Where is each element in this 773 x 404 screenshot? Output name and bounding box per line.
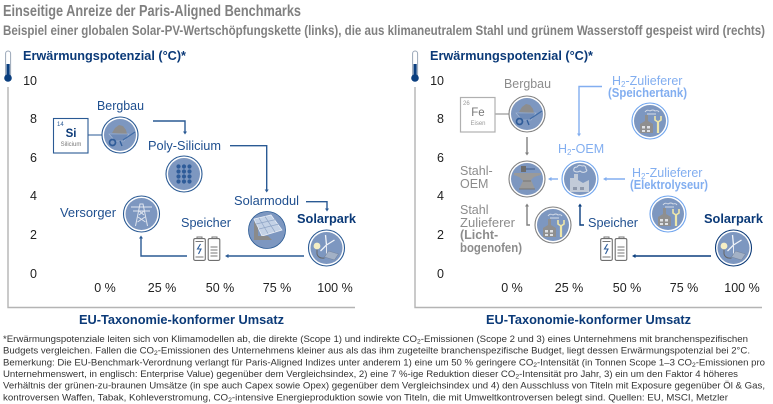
footnote: -Emissionen pro (696, 357, 765, 367)
node: Speicher: Speicher (181, 216, 231, 230)
footnote: -intensive Energieproduktion sowie von Titeln, die mit Umweltkontroversen belegt sind. Quellen: EU, MSCI, Metzler (232, 392, 728, 402)
footnote: -Emissionen (Scope 2 und 3) eines Unternehmens mit branchenspezifischen (421, 334, 748, 344)
node: Bergbau (504, 77, 551, 132)
footnote: Unternehmenswert, in englisch: Enterprise Value) gegenüber dem Vergleichsindex, 2) eine 7 %-ige Reduktion dieser CO (3, 369, 499, 379)
y axis labels: 2 (30, 228, 37, 242)
element box: iron (460, 98, 509, 132)
node: Stahl-OEM: OEM (460, 177, 488, 191)
y axis title: Erwärmungspotenzial (°C)* (23, 49, 186, 63)
y axis labels: 8 (437, 112, 444, 126)
node: H2-Zulieferer Elektrolyseur (630, 166, 708, 232)
footnote: 2 (515, 374, 519, 380)
footnote: 2 (417, 338, 421, 346)
node: Stahl-OEM (460, 161, 545, 197)
node: H2-Zulieferer Speichertank: 2 (621, 80, 626, 89)
node: H2-Zulieferer Speichertank: H (612, 74, 621, 88)
x axis labels: 50 % (613, 281, 641, 295)
y axis labels: 6 (437, 151, 444, 165)
element box: silicon (54, 118, 102, 153)
node: Speicher (181, 216, 231, 260)
footnote: -Emissionen des Unternehmens kleiner aus als das ihm zugeteilte branchenspezifische Budget, liegt dessen Erwärmungspotenzial bei 2°C. (158, 346, 750, 356)
x axis labels: 75 % (670, 281, 698, 295)
node: Bergbau: Bergbau (504, 77, 551, 91)
element box: iron: Eisen (470, 121, 486, 127)
y axis title: Erwärmungspotenzial (°C)* (430, 49, 593, 63)
node: Solarpark: Solarpark (704, 212, 763, 226)
x axis labels: 50 % (206, 281, 234, 295)
node: H2-Zulieferer Elektrolyseur: H (632, 166, 641, 180)
node: Solarmodul: Solarmodul (234, 194, 299, 208)
title: Einseitige Anreize der Paris-Aligned Benchmarks (3, 3, 301, 20)
y axis labels: 0 (30, 267, 37, 281)
element box: iron: Fe (471, 107, 485, 119)
x axis labels: 25 % (555, 281, 583, 295)
footnote: *Erwärmungspotenziale leiten sich von Klimamodellen ab, die direkte (Scope 1) und indirekte CO (3, 334, 402, 344)
node: Poly-Silicium (148, 139, 221, 192)
element box: silicon: 14 (57, 122, 64, 128)
node: H2-Zulieferer Elektrolyseur: (Elektrolyseur) (630, 178, 708, 192)
y axis labels: 6 (30, 151, 37, 165)
node: H2-OEM: -OEM (571, 142, 604, 156)
node: H2-Zulieferer Speichertank: (Speichertank) (608, 86, 687, 100)
node: Solarpark: Solarpark (297, 212, 356, 226)
footnote (3, 334, 765, 404)
node: H2-Zulieferer Speichertank: -Zulieferer (625, 74, 682, 88)
node: Versorger (60, 196, 160, 232)
x axis labels: 100 % (724, 281, 760, 295)
footnote: kontroversen Waffen, Tabak, Kohleverstromung, CO (3, 392, 218, 402)
footnote: 2 (154, 350, 158, 357)
node: Stahl-OEM: Stahl- (460, 164, 493, 178)
node: Versorger: Versorger (60, 206, 116, 220)
node: Solarpark (704, 212, 763, 266)
node: H2-OEM: 2 (567, 148, 572, 157)
footnote: Budgets vergleichen. Fallen die CO (3, 346, 149, 356)
element box: iron: 26 (463, 101, 470, 107)
y axis labels: 2 (437, 228, 444, 242)
x axis labels: 0 % (501, 281, 523, 295)
node: Bergbau (97, 99, 144, 153)
y axis labels: 4 (437, 189, 444, 203)
panel: left chart solar value chain (4, 49, 356, 327)
arrows: left value chain (139, 121, 329, 258)
x axis title: EU-Taxonomie-konformer Umsatz (79, 313, 284, 327)
icon: thermometer (4, 51, 12, 82)
y axis labels: 0 (437, 267, 444, 281)
y axis labels: 10 (430, 74, 444, 88)
node: H2-Zulieferer Elektrolyseur: 2 (641, 172, 646, 181)
y axis labels: 4 (30, 189, 37, 203)
node: Bergbau: Bergbau (97, 99, 144, 113)
x axis labels (501, 281, 760, 295)
panel: right chart steel and hydrogen chain (411, 49, 763, 327)
node: Speicher (588, 216, 638, 260)
element box: silicon: Si (66, 128, 76, 140)
y axis labels: 10 (23, 74, 37, 88)
footnote: 2 (692, 362, 696, 369)
node: Stahl Zulieferer Lichtbogenofen: (Licht- (460, 228, 498, 242)
arrows: right value chain (525, 86, 711, 258)
x axis labels (94, 281, 353, 295)
node: H2-Zulieferer Speichertank (608, 74, 687, 139)
node: H2-Zulieferer Elektrolyseur: -Zulieferer (645, 166, 702, 180)
x axis title: EU-Taxonomie-konformer Umsatz (486, 313, 691, 327)
node: Stahl Zulieferer Lichtbogenofen: Zulieferer (460, 216, 515, 230)
node: Stahl Zulieferer Lichtbogenofen (460, 203, 571, 255)
footnote: Bemerkung: Die EU-Benchmark-Verordnung verlangt für Paris-Aligned Indizes unter anderem 1) eine um 50 % geringere CO (3, 357, 517, 367)
footnote: Verhältnis der grünen-zu-braunen Umsätze (in spe auch Capex sowie Opex) gegenüber dem Vergleichsindex und 4) den Ausschluss von Titeln mit Exposure gegenüber Öl & Gas, (3, 381, 765, 391)
element box: silicon: Silicium (61, 142, 81, 148)
node: H2-OEM: H (558, 142, 567, 156)
y axis labels (23, 74, 37, 281)
y axis labels (430, 74, 444, 281)
node: Speicher: Speicher (588, 216, 638, 230)
node: Stahl Zulieferer Lichtbogenofen: bogenofen) (460, 241, 522, 255)
footnote: -Intensität pro Jahr, 3) ein um den Faktor 4 höheres (519, 369, 738, 379)
footnote: 2 (228, 397, 232, 404)
footnote: 2 (533, 362, 537, 369)
node: Poly-Silicium: Poly-Silicium (148, 139, 221, 153)
node: Solarmodul (234, 194, 299, 248)
node: H2-OEM (558, 142, 604, 197)
footnote: -Intensität (in Tonnen Scope 1–3 CO (537, 357, 692, 367)
icon: thermometer (411, 51, 419, 82)
axes (415, 87, 762, 308)
x axis labels: 25 % (148, 281, 176, 295)
node: Solarpark (297, 212, 356, 266)
axes (8, 87, 355, 308)
x axis labels: 100 % (317, 281, 353, 295)
y axis labels: 8 (30, 112, 37, 126)
node: Stahl Zulieferer Lichtbogenofen: Stahl (460, 203, 488, 217)
x axis labels: 0 % (94, 281, 116, 295)
x axis labels: 75 % (263, 281, 291, 295)
